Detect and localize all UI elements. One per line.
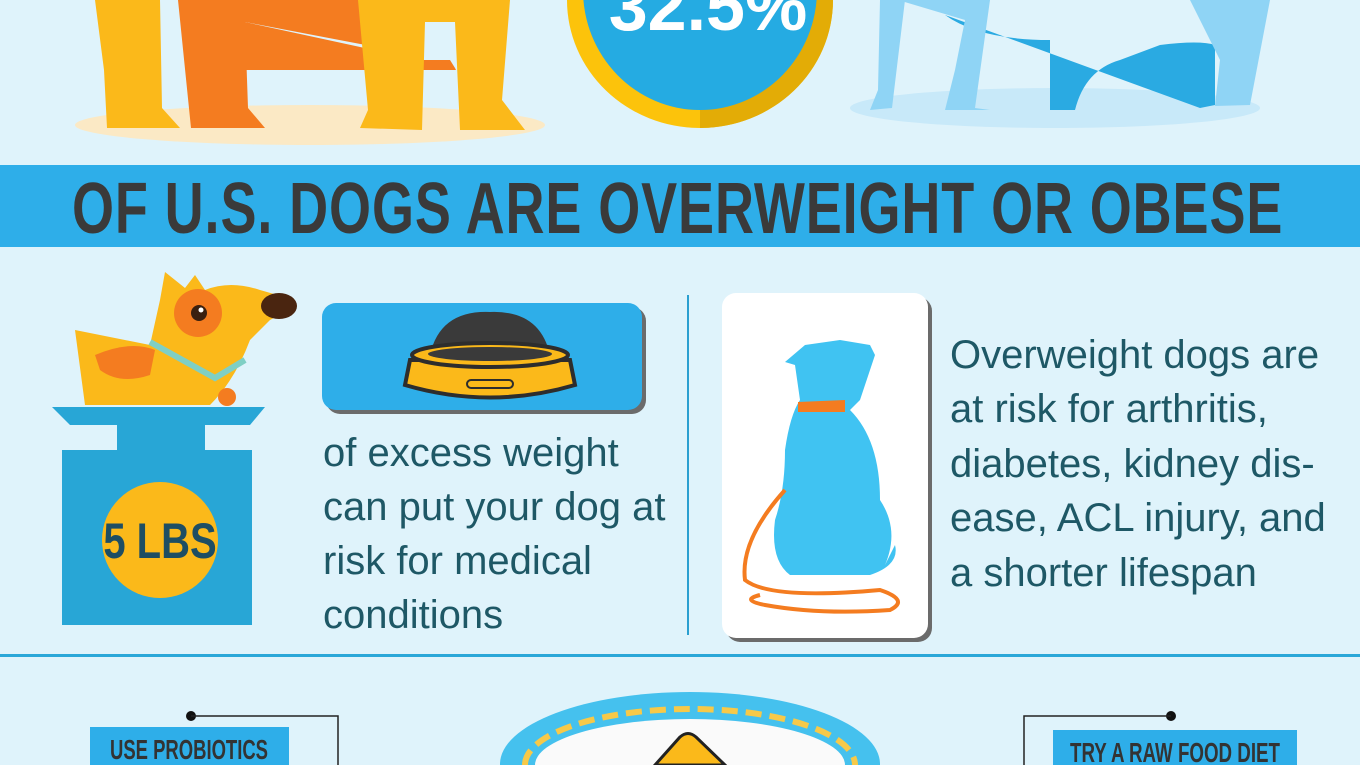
text: health risks: a shorter lifespan: [950, 551, 1257, 595]
illustration: blue dog legs: [850, 0, 1270, 128]
text: excess weight: [323, 431, 665, 637]
text: excess weight: of excess weight: [323, 431, 619, 475]
text: health risks: Overweight dogs are: [950, 333, 1319, 377]
banner: headline: OF U.S. DOGS ARE OVERWEIGHT OR OBESE: [72, 169, 1283, 249]
text: health risks: at risk for arthritis,: [950, 387, 1268, 431]
icon: warning badge: [500, 692, 880, 765]
text: excess weight: conditions: [323, 593, 503, 637]
icon: dog on scale: [52, 272, 297, 625]
callout: use probiotics: USE PROBIOTICS: [110, 734, 268, 765]
callout: raw food diet: [1024, 711, 1297, 765]
panel: sitting dog card: [722, 293, 932, 642]
text: excess weight: can put your dog at: [323, 485, 665, 529]
text: health risks: diabetes, kidney dis-: [950, 442, 1315, 486]
text: excess weight: risk for medical: [323, 539, 592, 583]
statistic circle: 32.5%: [567, 0, 833, 128]
panel: food bowl card: [322, 303, 646, 414]
illustration: orange dog legs: [75, 0, 545, 145]
text: health risks: [950, 333, 1326, 595]
icon: dog on scale: 5 LBS: [103, 513, 217, 569]
callout: use probiotics: [90, 711, 338, 765]
text: health risks: ease, ACL injury, and: [950, 496, 1326, 540]
